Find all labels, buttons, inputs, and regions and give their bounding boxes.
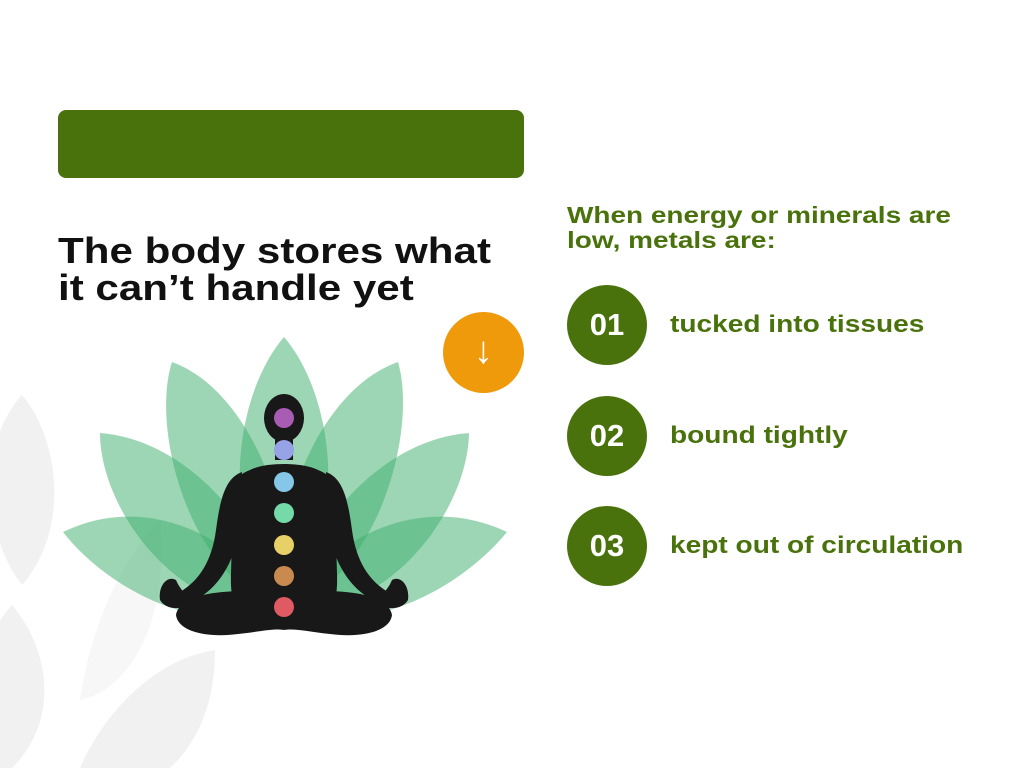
right arm [326,472,388,604]
icon: down arrow badge [443,312,524,393]
header bar [58,110,524,178]
subtitle: When energy or minerals are [567,202,951,228]
title: The body stores what [58,230,491,271]
list item 01 [567,285,924,365]
hands [160,579,192,608]
subtitle [567,202,951,253]
icon: down arrow badge: ↓ [474,330,493,372]
list item 03: kept out of circulation [670,532,963,559]
list item 02 [567,396,848,476]
title [58,230,491,308]
left arm [180,472,242,604]
legs [176,591,392,635]
list item 02: bound tightly [670,422,848,449]
list item 01: 01 [590,307,624,342]
list item 02: 02 [590,418,624,453]
subtitle: low, metals are: [567,227,776,253]
list item 03 [567,506,963,586]
illustration: meditating figure on lotus [63,337,507,636]
torso [228,464,340,600]
list item 01: tucked into tissues [670,311,924,338]
list item 03: 03 [590,528,624,563]
title: it can’t handle yet [58,267,414,308]
